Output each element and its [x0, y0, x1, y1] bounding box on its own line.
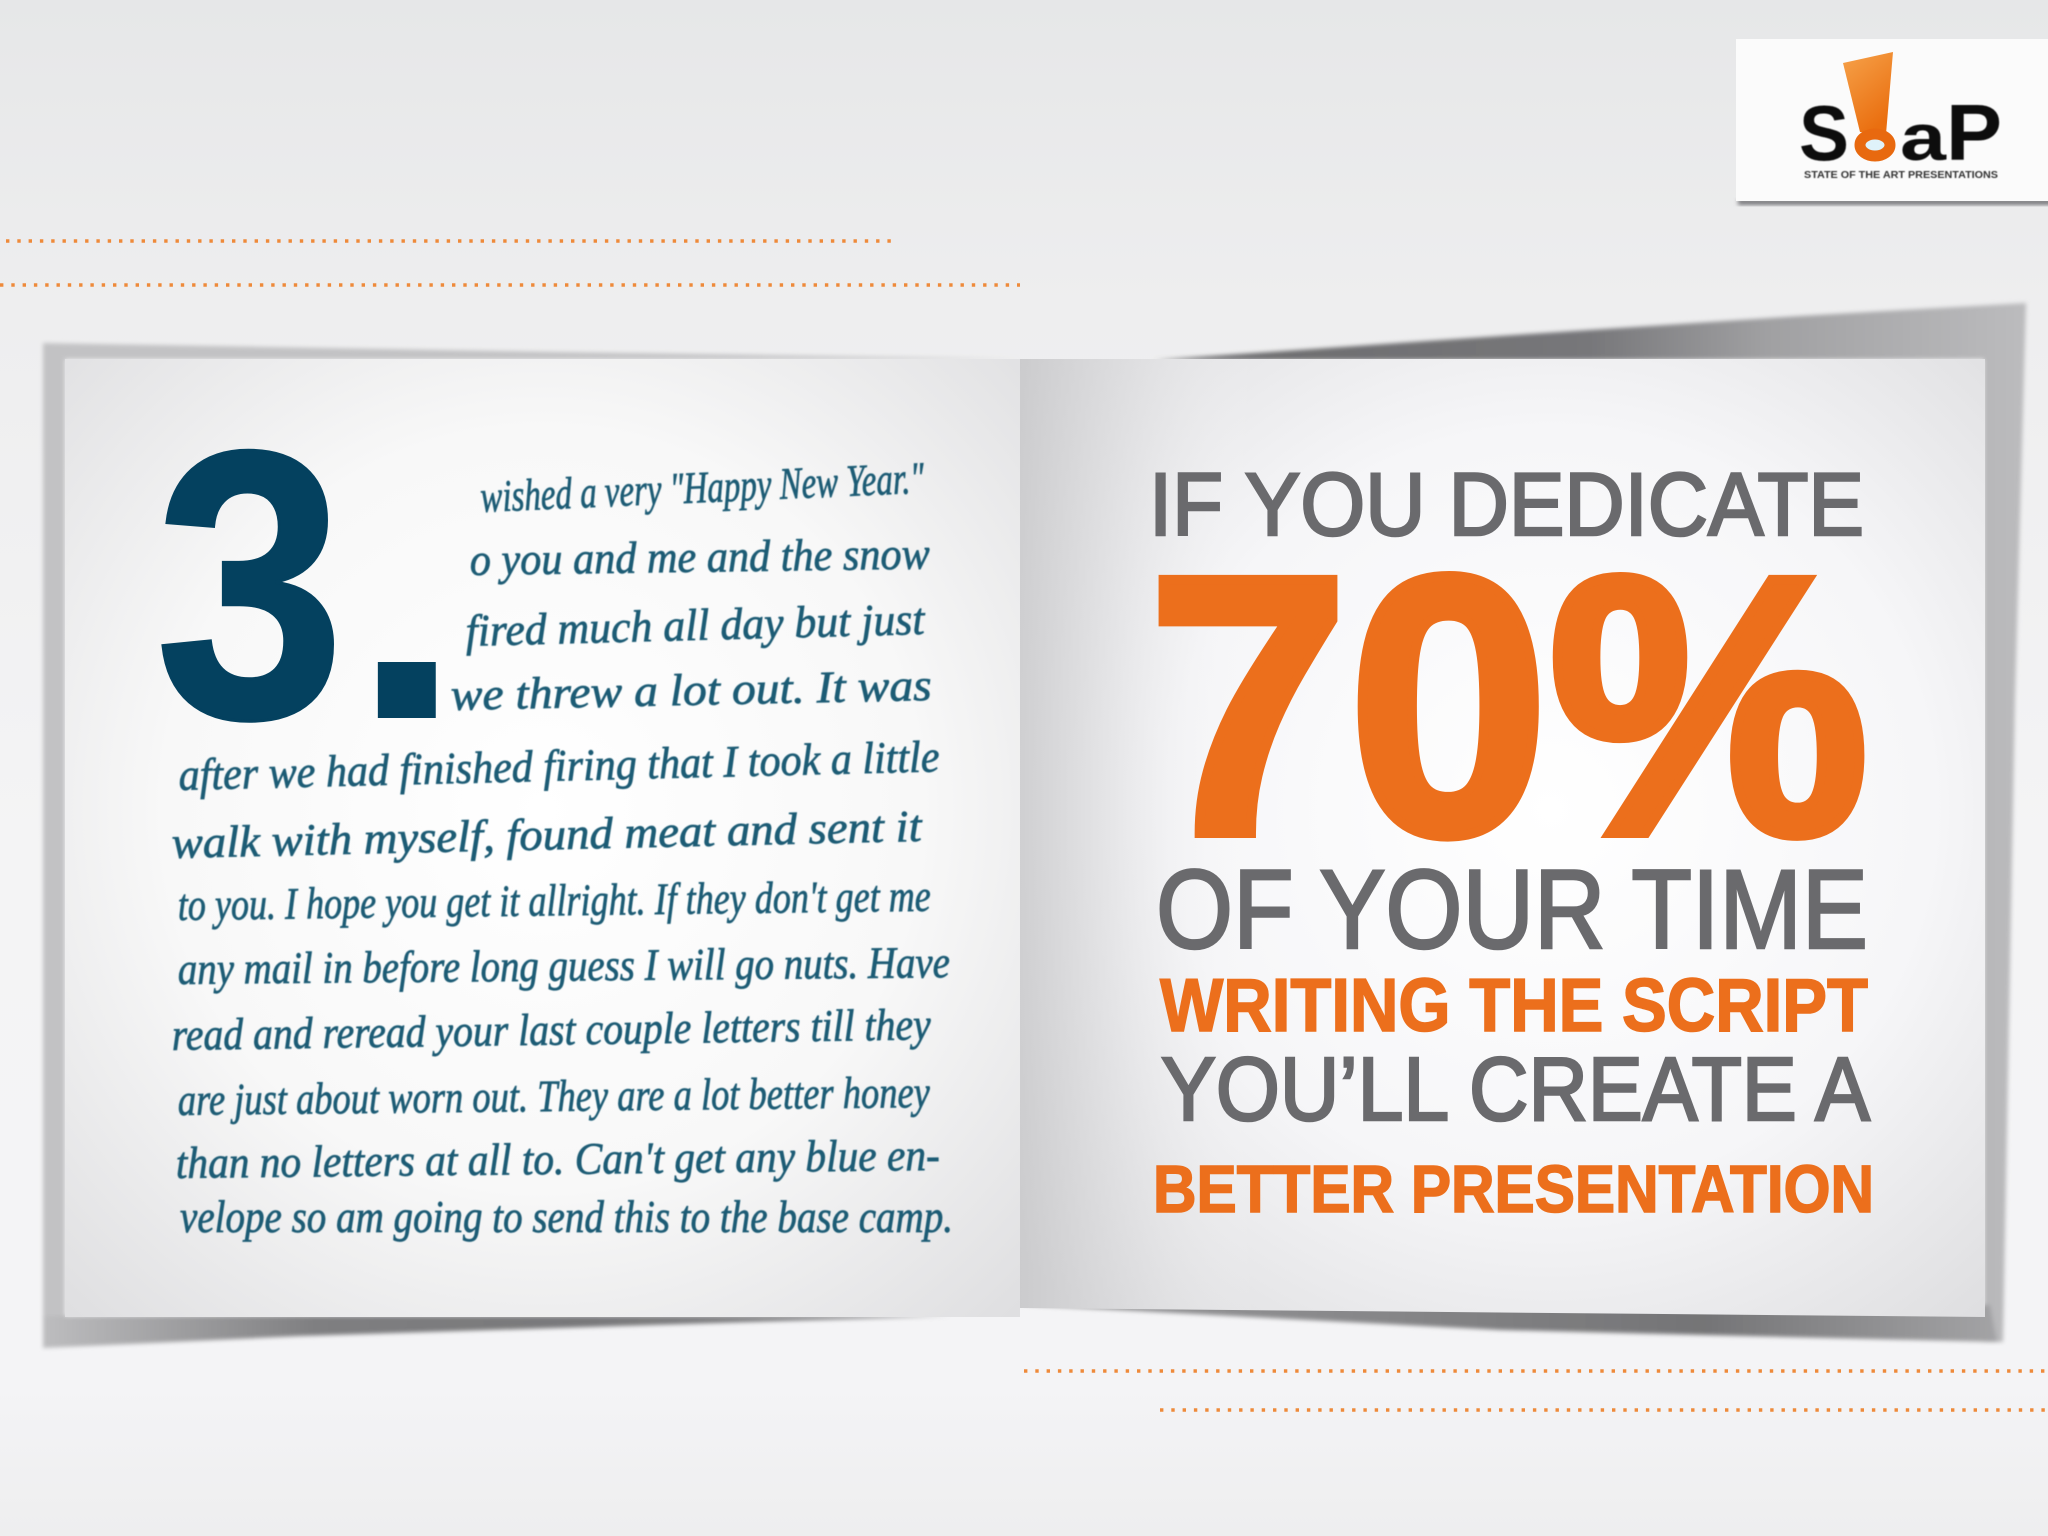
logo mark: ring	[1860, 134, 1890, 156]
headline: better presentation: BETTER PRESENTATION	[1153, 1152, 1874, 1227]
panel: right page	[1020, 359, 1985, 1317]
handwritten letter: to you. I hope you get it allright. If they don't get me	[178, 871, 931, 930]
right page sheet	[1020, 359, 1985, 1317]
big number 3	[155, 371, 464, 798]
open book shadow	[43, 303, 2026, 1348]
logo letters: S	[1799, 89, 1849, 177]
handwritten letter: we threw a lot out. It was	[450, 660, 932, 720]
panel: left page	[65, 359, 1020, 1317]
logo mark: exclamation	[1843, 52, 1893, 134]
handwritten letter: fired much all day but just	[465, 594, 927, 656]
dotted rule top 1	[6, 239, 893, 243]
handwritten letter: are just about worn out. They are a lot better honey	[178, 1067, 930, 1125]
headline: 70%: 70%	[1148, 500, 1869, 911]
handwritten letter: o you and me and the snow	[469, 529, 930, 585]
dotted rule bottom 1	[1024, 1369, 2048, 1373]
logo letters	[1799, 88, 2002, 177]
handwritten letter: after we had finished firing that I took a little	[178, 731, 940, 800]
headline: of your time: OF YOUR TIME	[1156, 847, 1868, 972]
handwritten letter: than no letters at all to. Can't get any blue en-	[176, 1130, 940, 1188]
logo letters: P	[1946, 88, 2002, 177]
logo card background	[1736, 39, 2048, 201]
handwritten letter	[171, 453, 953, 1242]
handwritten letter: any mail in before long guess I will go nuts. Have	[178, 937, 950, 994]
logo card	[1736, 39, 2048, 205]
logo letters: a	[1900, 100, 1948, 174]
right page inner fold shade	[1020, 359, 1985, 1317]
handwritten letter: read and reread your last couple letters till they	[171, 999, 931, 1060]
big number 3: .	[350, 378, 464, 798]
big number 3: 3	[155, 371, 345, 798]
headline: writing the script: WRITING THE SCRIPT	[1160, 963, 1868, 1047]
handwritten letter: walk with myself, found meat and sent it	[171, 801, 924, 868]
dotted rule bottom 2	[1160, 1408, 2048, 1412]
headline: you'll create a: YOU’LL CREATE A	[1161, 1040, 1870, 1140]
handwritten letter: velope so am going to send this to the base camp.	[180, 1192, 953, 1242]
logo tagline: STATE OF THE ART PRESENTATIONS	[1804, 170, 1998, 181]
logo card shadow	[1738, 199, 2048, 205]
headline: if you dedicate: IF YOU DEDICATE	[1149, 454, 1864, 554]
dotted rule top 2	[0, 283, 1020, 287]
handwritten letter: wished a very "Happy New Year."	[479, 453, 926, 522]
